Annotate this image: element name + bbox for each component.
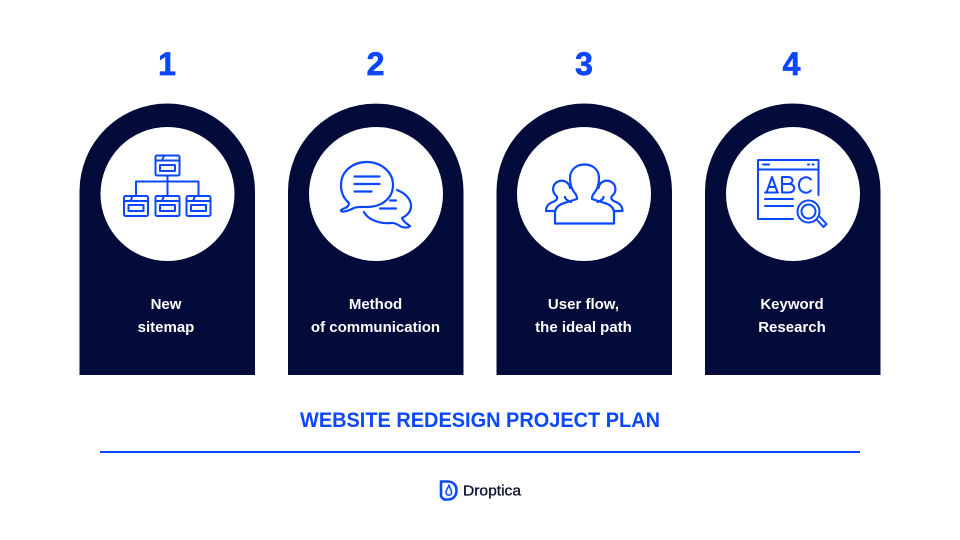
icon circle 4 xyxy=(726,127,860,261)
label 3: the ideal path xyxy=(535,319,632,336)
label 2: Method xyxy=(349,296,402,313)
icon circle 1 xyxy=(100,127,234,261)
icon: sitemap xyxy=(124,156,210,216)
icon: speech bubbles xyxy=(341,162,411,228)
logo: Droptica xyxy=(441,482,522,500)
icon circle 3 xyxy=(517,127,651,261)
panel 2 arch xyxy=(288,104,464,375)
step number 4: 4 xyxy=(783,46,801,82)
label 2: of communication xyxy=(311,319,440,336)
label 1: New xyxy=(151,296,182,313)
label 1: sitemap xyxy=(138,319,194,336)
label 2 xyxy=(311,296,440,336)
column 2: method of communication xyxy=(288,46,464,375)
label 1 xyxy=(138,296,194,336)
column 1: new sitemap xyxy=(80,46,255,375)
divider line xyxy=(100,451,860,453)
title: WEBSITE REDESIGN PROJECT PLAN xyxy=(300,409,660,432)
panel 3 arch xyxy=(496,104,672,375)
step number 1: 1 xyxy=(158,46,176,82)
panel 1 arch xyxy=(80,104,255,375)
icon: ABC browser with magnifier xyxy=(758,160,826,227)
icon circle 2 xyxy=(309,127,443,261)
label 4: Research xyxy=(758,319,826,336)
label 3: User flow, xyxy=(548,296,619,313)
step number 2: 2 xyxy=(367,46,384,82)
step number 3: 3 xyxy=(575,46,593,82)
wordmark: Droptica xyxy=(463,484,522,500)
icon: user group xyxy=(546,164,622,224)
label 4 xyxy=(758,296,826,336)
column 3: user flow xyxy=(496,46,672,375)
icon: Droptica D mark xyxy=(441,482,456,500)
label 4: Keyword xyxy=(760,296,824,313)
label 3 xyxy=(535,296,632,336)
panel 4 arch xyxy=(705,104,880,375)
column 4: keyword research xyxy=(705,46,880,375)
